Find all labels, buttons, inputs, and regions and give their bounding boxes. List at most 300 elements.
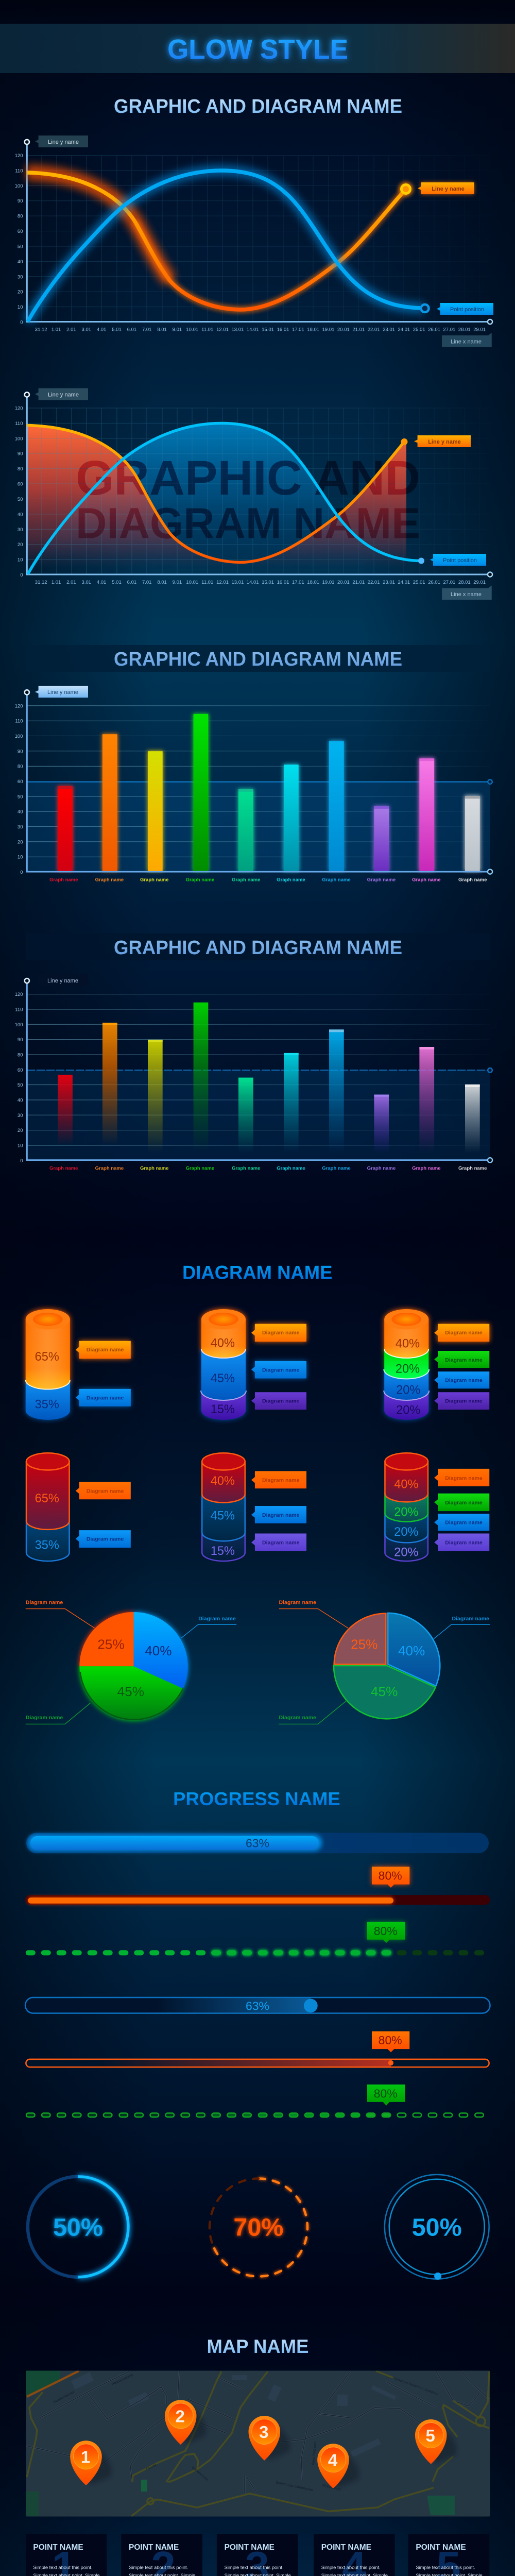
radial progress: 50 percent glow: 50% [53, 2213, 103, 2241]
bar labels [49, 877, 487, 883]
y axis labels: 80 [18, 1052, 23, 1058]
bar labels: Graph name [458, 877, 487, 883]
bar chart: glow [15, 645, 492, 883]
x axis labels: 19.01 [322, 327, 334, 333]
blue area [28, 423, 424, 575]
x axis labels: 16.01 [277, 580, 289, 585]
x axis labels: 1.01 [52, 327, 61, 333]
x axis labels: 27.01 [443, 580, 455, 585]
cylinder: 40/45/15 outline [202, 1453, 245, 1561]
progress section [25, 1789, 490, 2280]
cylinder: 40/45/15 glow [201, 1309, 246, 1420]
map pin 5: 5 [426, 2426, 435, 2445]
labels: cylinder 65/35 glow: Diagram name [87, 1347, 124, 1353]
point card 2: Simple text about this point. [129, 2565, 188, 2570]
bar labels: Graph name [458, 1165, 487, 1171]
cylinder: 40/20/20/20 outline: 40% [394, 1478, 419, 1491]
label: x axis: Line x name [451, 591, 482, 598]
x axis labels: 27.01 [443, 327, 455, 333]
labels: cylinder 40/20/20/20 glow: Diagram name [445, 1357, 483, 1363]
x axis labels: 31.12 [35, 327, 47, 333]
map pin 2 [165, 2400, 207, 2445]
x axis labels: 4.01 [97, 580, 106, 585]
watermark text [76, 451, 420, 547]
cylinder: 40/20/20/20 glow: 40% [396, 1337, 420, 1350]
x axis labels: 17.01 [292, 580, 304, 585]
x axis labels: 18.01 [307, 327, 319, 333]
label: orange line: Line y name [428, 439, 461, 445]
bar labels: Graph name [322, 877, 351, 883]
y axis labels: 110 [15, 719, 23, 724]
cylinder: 40/20/20/20 outline [385, 1453, 428, 1561]
x axis labels: 13.01 [232, 327, 244, 333]
y axis labels: 120 [15, 703, 23, 709]
label: y axis [35, 135, 88, 147]
y axis labels: 50 [18, 794, 23, 800]
labels: cylinder 40/20/20/20 outline: Diagram name [445, 1500, 483, 1506]
threshold line [27, 1068, 492, 1073]
y axis labels: 50 [18, 244, 23, 249]
x axis labels: 8.01 [157, 580, 167, 585]
y axis labels: 110 [15, 168, 23, 174]
heading: PROGRESS NAME [173, 1789, 340, 1809]
point card 4 [314, 2534, 395, 2576]
x axis labels: 4.01 [97, 327, 106, 333]
y axis labels: 100 [15, 734, 23, 739]
label: y axis: Line y name [47, 689, 78, 696]
labels: cylinder 40/20/20/20 glow: Diagram name [445, 1330, 483, 1336]
y axis labels: 30 [18, 274, 23, 280]
map: Льва Толстого [312, 2442, 317, 2465]
progress bar: green outline dashes [26, 2113, 484, 2117]
x axis labels: 1.01 [52, 580, 61, 585]
axes [25, 978, 492, 1162]
cylinder: 40/20/20/20 glow: 20% [396, 1383, 420, 1396]
x axis labels: 14.01 [247, 327, 259, 333]
y axis labels: 50 [18, 497, 23, 502]
x axis labels [35, 580, 486, 585]
y axis labels: 0 [20, 572, 23, 578]
tooltip: outline red 80 percent: 80% [379, 2033, 402, 2047]
y axis labels: 40 [18, 1097, 23, 1103]
x axis labels: 14.01 [247, 580, 259, 585]
label: y axis [35, 388, 88, 400]
point card 2 [121, 2534, 202, 2576]
y axis labels: 80 [18, 214, 23, 219]
map: Шилкинская [191, 2466, 209, 2482]
label: y axis [35, 686, 88, 698]
bar labels: Graph name [49, 1165, 78, 1171]
y axis labels: 60 [18, 481, 23, 487]
chart grid [27, 408, 490, 575]
x axis labels: 19.01 [322, 580, 334, 585]
pie chart: glow: 25% [97, 1636, 125, 1652]
point card 4: POINT NAME [321, 2543, 371, 2552]
cylinder: 40/20/20/20 outline: 20% [394, 1525, 419, 1538]
title banner [0, 24, 515, 73]
cylinder: 40/45/15 outline: 15% [211, 1544, 235, 1557]
map pin 4 [317, 2444, 359, 2488]
radial progress: 70 percent dashed: 70% [233, 2213, 283, 2241]
point card 2: POINT NAME [129, 2543, 179, 2552]
pie chart: glow [79, 1612, 188, 1720]
x axis labels: 21.01 [352, 580, 365, 585]
labels: cylinder 65/35 outline [76, 1482, 131, 1548]
labels: cylinder 40/20/20/20 glow: Diagram name [445, 1378, 483, 1384]
labels: cylinder 65/35 glow [76, 1341, 131, 1406]
cylinder: 65/35 glow [26, 1309, 70, 1420]
cylinder: 65/35 outline: 65% [35, 1492, 59, 1505]
x axis labels: 25.01 [413, 580, 425, 585]
title banner: GLOW STYLE [167, 34, 348, 65]
bar labels: Graph name [277, 1165, 305, 1171]
map: проспект Красного Знамени [393, 2377, 439, 2396]
y axis labels: 90 [18, 451, 23, 457]
labels: cylinder 65/35 outline: Diagram name [87, 1536, 124, 1543]
cylinder: 40/20/20/20 outline: 20% [394, 1546, 419, 1559]
cylinder: 40/45/15 outline: 40% [211, 1474, 235, 1487]
x axis labels: 21.01 [352, 327, 365, 333]
radial progress: 50 percent rings [385, 2175, 489, 2280]
point card 1: POINT NAME [33, 2543, 83, 2552]
point card 5: POINT NAME [416, 2543, 466, 2552]
bar labels: Graph name [95, 877, 124, 883]
label: y axis: Line y name [48, 392, 79, 398]
label: point position: Point position [443, 557, 477, 564]
y axis labels: 10 [18, 855, 23, 860]
label: orange line [418, 182, 474, 194]
x axis labels: 26.01 [428, 580, 440, 585]
x axis labels: 20.01 [337, 580, 350, 585]
progress bar: blue outline [25, 1997, 490, 2013]
bar chart: fading [15, 934, 492, 1171]
y axis labels: 20 [18, 839, 23, 845]
chart grid [27, 155, 490, 322]
cylinder: 65/35 glow: 35% [35, 1398, 59, 1411]
y axis labels: 10 [18, 557, 23, 563]
y axis labels: 0 [20, 319, 23, 326]
x axis labels: 24.01 [398, 580, 410, 585]
line chart: filled areas [15, 388, 492, 600]
bar labels: Graph name [232, 877, 260, 883]
bars [57, 714, 480, 872]
cylinder: 40/45/15 glow: 45% [211, 1371, 235, 1385]
x axis labels: 24.01 [398, 327, 410, 333]
labels: cylinder 40/45/15 glow [251, 1324, 306, 1410]
y axis labels: 20 [18, 542, 23, 548]
y axis labels: 0 [20, 870, 23, 875]
cylinder: 40/20/20/20 glow [384, 1309, 428, 1420]
cylinder: 65/35 outline: 35% [35, 1538, 59, 1552]
bar labels: Graph name [140, 1165, 168, 1171]
map: Всеволода Сибирцева [276, 2480, 313, 2492]
blue curve [28, 423, 424, 574]
bar labels: Graph name [412, 1165, 441, 1171]
x axis labels: 15.01 [262, 580, 274, 585]
y axis labels: 10 [18, 1143, 23, 1148]
orange curve [27, 426, 408, 563]
x axis labels: 11.01 [201, 327, 213, 333]
x axis labels: 12.01 [216, 580, 229, 585]
label: orange line [414, 435, 471, 447]
axes [25, 690, 492, 874]
y axis labels: 30 [18, 527, 23, 533]
bar labels: Graph name [322, 1165, 351, 1171]
x axis labels: 12.01 [216, 327, 229, 333]
labels: cylinder 65/35 glow: Diagram name [87, 1395, 124, 1401]
x axis labels: 5.01 [112, 580, 122, 585]
labels: cylinder 40/45/15 outline: Diagram name [262, 1512, 300, 1518]
map pin 1: 1 [81, 2447, 90, 2466]
x axis labels: 7.01 [142, 327, 151, 333]
tooltip: outline red 80 percent [372, 2031, 409, 2053]
y axis labels: 20 [18, 1128, 23, 1133]
orange area [27, 426, 406, 575]
x axis labels: 6.01 [127, 327, 136, 333]
y axis labels: 40 [18, 259, 23, 265]
label: x axis [442, 333, 492, 347]
y axis labels: 120 [15, 153, 23, 159]
radial progress: 50 percent rings: 50% [412, 2213, 462, 2241]
grid [27, 994, 490, 1145]
y axis labels: 90 [18, 1037, 23, 1043]
labels: cylinder 40/20/20/20 glow [434, 1324, 489, 1410]
labels: cylinder 40/20/20/20 outline [434, 1469, 489, 1551]
x axis labels: 20.01 [337, 327, 350, 333]
bar labels: Graph name [232, 1165, 260, 1171]
line chart: glow [15, 135, 493, 347]
x axis labels: 28.01 [458, 580, 471, 585]
tooltip: outline green 80 percent: 80% [374, 2087, 398, 2100]
labels: cylinder 40/20/20/20 outline: Diagram name [445, 1520, 483, 1526]
labels: cylinder 40/45/15 glow: Diagram name [262, 1330, 300, 1336]
bar labels: Graph name [95, 1165, 124, 1171]
x axis labels: 25.01 [413, 327, 425, 333]
label: point position [437, 303, 493, 315]
cylinder: 40/20/20/20 glow: 20% [396, 1362, 420, 1376]
bar labels: Graph name [277, 877, 305, 883]
map: Жуковского [321, 2483, 341, 2492]
progress bar: red outline [26, 2059, 489, 2067]
pie callouts: glow [26, 1600, 236, 1724]
label: point position: Point position [450, 307, 484, 313]
y axis labels: 100 [15, 436, 23, 442]
cylinder: 40/45/15 glow: 15% [211, 1402, 235, 1416]
point card 5: Simple text about this point. [416, 2565, 475, 2570]
tooltip: red 80 percent [372, 1867, 409, 1888]
cylinder: 40/45/15 glow: 40% [211, 1336, 235, 1349]
bar labels: Graph name [186, 1165, 214, 1171]
bar labels: Graph name [412, 877, 441, 883]
labels: cylinder 65/35 outline: Diagram name [87, 1488, 124, 1494]
pie chart: glow: 45% [117, 1684, 144, 1699]
map pin 4: 4 [328, 2450, 338, 2469]
bar labels [49, 1165, 487, 1171]
radial progress: 70 percent dashed [210, 2178, 307, 2277]
y axis labels: 30 [18, 1113, 23, 1118]
x axis labels: 3.01 [82, 327, 91, 333]
x axis labels: 7.01 [142, 580, 151, 585]
x axis labels: 9.01 [173, 580, 182, 585]
point card 5 [408, 2534, 489, 2576]
bar labels: Graph name [367, 877, 396, 883]
x axis labels: 5.01 [112, 327, 122, 333]
x axis labels: 22.01 [368, 327, 380, 333]
pie chart: outline: 25% [351, 1636, 377, 1652]
bar labels: Graph name [367, 1165, 396, 1171]
point card 1 [26, 2534, 107, 2576]
heading: DIAGRAM NAME [182, 1262, 332, 1283]
x axis labels: 9.01 [173, 327, 182, 333]
y axis labels: 90 [18, 198, 23, 204]
x axis labels: 11.01 [201, 580, 213, 585]
label: y axis: Line y name [48, 139, 79, 145]
map: Некрасовская [111, 2373, 134, 2386]
blue curve [28, 171, 428, 321]
cylinder: 40/20/20/20 glow: 20% [396, 1403, 420, 1416]
point card 3: POINT NAME [225, 2543, 274, 2552]
map pin 5 [415, 2419, 457, 2464]
pie callouts: glow: Diagram name [26, 1600, 63, 1606]
x axis labels: 10.01 [186, 327, 198, 333]
x axis labels: 8.01 [157, 327, 167, 333]
threshold band [27, 1070, 490, 1160]
point card 3 [217, 2534, 298, 2576]
x axis labels: 29.01 [473, 580, 486, 585]
labels: cylinder 40/20/20/20 glow: Diagram name [445, 1398, 483, 1404]
y axis labels: 20 [18, 290, 23, 295]
grid [27, 706, 490, 857]
heading band [26, 934, 490, 960]
heading band: GRAPHIC AND DIAGRAM NAME [114, 937, 402, 959]
labels: cylinder 40/45/15 glow: Diagram name [262, 1367, 300, 1374]
map: Некрасовская [53, 2390, 75, 2404]
x axis labels: 17.01 [292, 327, 304, 333]
x axis labels: 2.01 [66, 327, 76, 333]
label: x axis [442, 585, 492, 600]
cylinder: 40/20/20/20 outline: 20% [394, 1505, 419, 1519]
pie chart: outline [334, 1613, 440, 1719]
x axis labels: 13.01 [232, 580, 244, 585]
pie callouts: glow: Diagram name [26, 1715, 63, 1721]
pie chart: outline: 45% [371, 1684, 398, 1699]
x axis labels: 29.01 [473, 327, 486, 333]
labels: cylinder 40/20/20/20 outline: Diagram name [445, 1540, 483, 1546]
labels: cylinder 40/45/15 outline [251, 1471, 306, 1551]
threshold line [27, 779, 492, 784]
label: point position [430, 554, 486, 566]
labels: cylinder 40/45/15 outline: Diagram name [262, 1540, 300, 1546]
y axis labels: 110 [15, 1007, 23, 1012]
y axis labels: 80 [18, 764, 23, 770]
x axis labels: 15.01 [262, 327, 274, 333]
x axis labels: 3.01 [82, 580, 91, 585]
progress bar: blue glow [26, 1833, 489, 1853]
map: Гоголя [146, 2463, 157, 2471]
x axis labels: 23.01 [383, 327, 395, 333]
y axis labels: 100 [15, 183, 23, 189]
y axis labels: 80 [18, 466, 23, 472]
tooltip: green 80 percent [367, 1922, 405, 1943]
y axis labels [15, 406, 23, 578]
watermark text: GRAPHIC AND [76, 451, 420, 505]
bar labels: Graph name [49, 877, 78, 883]
heading band: GRAPHIC AND DIAGRAM NAME [114, 649, 402, 670]
x axis labels: 22.01 [368, 580, 380, 585]
bar labels: Graph name [186, 877, 214, 883]
pie chart: outline: 40% [398, 1643, 425, 1658]
x axis labels: 18.01 [307, 580, 319, 585]
pie callouts: outline [279, 1600, 490, 1724]
x axis labels: 16.01 [277, 327, 289, 333]
pie callouts: outline: Diagram name [452, 1616, 489, 1622]
map [26, 2370, 490, 2516]
map pin 2: 2 [176, 2406, 185, 2426]
y axis labels [15, 992, 23, 1164]
progress bar: red glow [25, 1895, 490, 1905]
pie chart: glow: 40% [145, 1643, 172, 1658]
x axis labels [35, 327, 486, 333]
bars [58, 1003, 480, 1154]
y axis labels: 10 [18, 304, 23, 310]
cylinder: 65/35 outline [26, 1453, 70, 1561]
label: y axis [35, 974, 88, 986]
label: y axis: Line y name [47, 978, 78, 984]
radial progress: 50 percent glow [28, 2177, 128, 2277]
x axis labels: 23.01 [383, 580, 395, 585]
heading: map: MAP NAME [207, 2336, 309, 2357]
y axis labels: 120 [15, 992, 23, 997]
x axis labels: 31.12 [35, 580, 47, 585]
labels: cylinder 40/20/20/20 outline: Diagram name [445, 1476, 483, 1482]
heading band [26, 645, 490, 672]
y axis labels: 40 [18, 809, 23, 815]
x axis labels: 10.01 [186, 580, 198, 585]
label: x axis: Line x name [451, 339, 482, 345]
progress bar: blue outline: 63% [246, 1999, 269, 2012]
y axis labels: 100 [15, 1022, 23, 1028]
y axis labels: 0 [20, 1158, 23, 1164]
y axis labels [15, 703, 23, 875]
pie callouts: outline: Diagram name [279, 1600, 316, 1606]
tooltip: green 80 percent: 80% [374, 1924, 398, 1938]
y axis labels: 50 [18, 1082, 23, 1088]
map pin 3: 3 [259, 2422, 268, 2442]
x axis labels: 2.01 [66, 580, 76, 585]
heading: line chart: GRAPHIC AND DIAGRAM NAME [114, 96, 402, 117]
y axis labels: 40 [18, 512, 23, 517]
point card 3: Simple text about this point. [225, 2565, 284, 2570]
axes [25, 392, 492, 577]
pie callouts: outline: Diagram name [279, 1715, 316, 1721]
y axis labels: 60 [18, 229, 23, 234]
progress bar: green dashes [26, 1950, 484, 1956]
orange curve [27, 173, 413, 310]
y axis labels: 60 [18, 779, 23, 785]
tooltip: outline green 80 percent [367, 2084, 405, 2106]
cylinder: 40/45/15 outline: 45% [211, 1509, 235, 1522]
y axis labels [15, 153, 23, 326]
point card 4: Simple text about this point. [321, 2565, 381, 2570]
tooltip: red 80 percent: 80% [379, 1869, 402, 1883]
axes [25, 140, 492, 324]
bar labels: Graph name [140, 877, 168, 883]
labels: cylinder 40/45/15 glow: Diagram name [262, 1398, 300, 1404]
x axis labels: 28.01 [458, 327, 471, 333]
map pin 1 [70, 2441, 112, 2485]
x axis labels: 6.01 [127, 580, 136, 585]
watermark text: DIAGRAM NAME [76, 499, 420, 547]
